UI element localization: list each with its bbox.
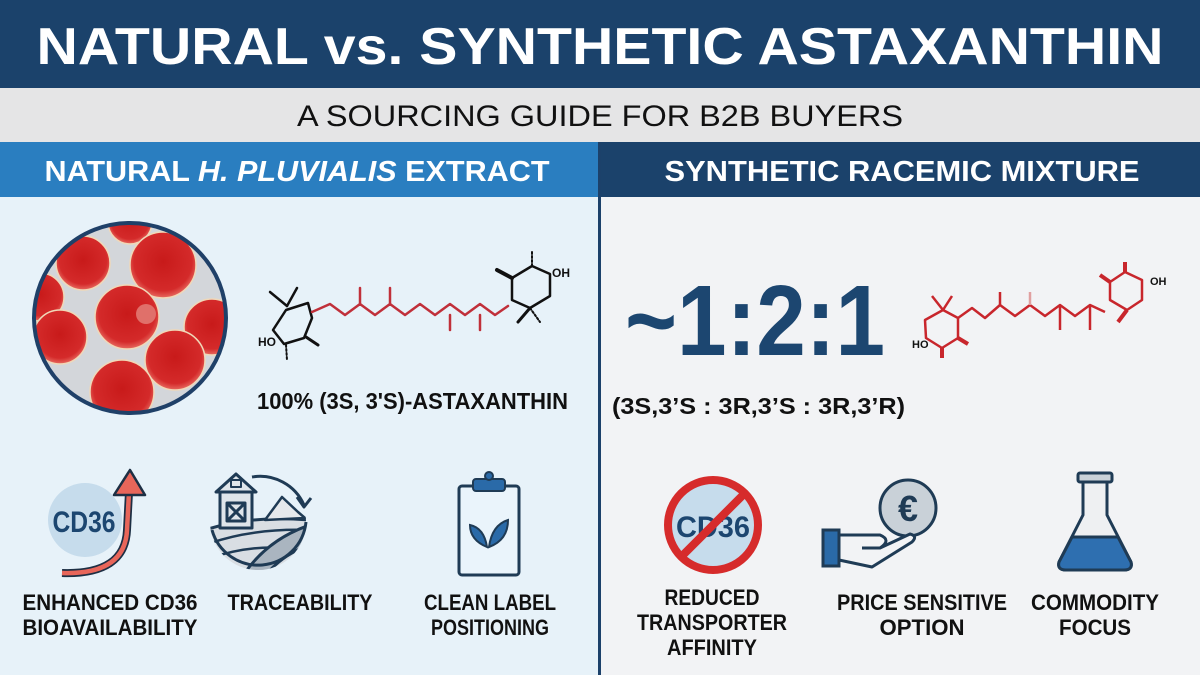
labels: synthetic traits: REDUCED	[664, 585, 760, 610]
labels: synthetic traits: TRANSPORTER	[637, 610, 787, 635]
subtitle: A SOURCING GUIDE FOR B2B BUYERS	[297, 100, 903, 133]
labels: natural benefits	[22, 590, 556, 640]
backgrounds	[0, 197, 600, 675]
label: natural stereochemistry: 100% (3S, 3'S)-ASTAXANTHIN	[257, 388, 568, 414]
title band	[0, 0, 1200, 88]
icon: euro coin hand: €	[898, 488, 918, 529]
icon: euro coin hand	[823, 480, 936, 567]
icon: CD36 prohibited: CD36	[676, 511, 750, 544]
molecule: synthetic: OH	[1150, 276, 1167, 288]
labels: synthetic traits: OPTION	[880, 615, 964, 640]
icon: flask	[1059, 473, 1131, 570]
header: synthetic: SYNTHETIC RACEMIC MIXTURE	[664, 156, 1140, 188]
subtitle band	[0, 88, 1200, 142]
icon: CD36 prohibited	[668, 480, 758, 570]
labels: natural benefits: CLEAN LABEL	[424, 590, 556, 615]
molecule: natural astaxanthin: HO	[258, 335, 276, 349]
molecule: synthetic: HO	[912, 339, 929, 351]
label: synthetic stereochemistry: (3S,3’S : 3R,3’S : 3R,3’R)	[612, 393, 905, 419]
labels: natural benefits: POSITIONING	[431, 615, 549, 640]
title: NATURAL vs. SYNTHETIC ASTAXANTHIN	[36, 18, 1164, 76]
labels: natural benefits: ENHANCED CD36	[22, 590, 198, 615]
header: natural	[0, 142, 598, 197]
labels: synthetic traits: AFFINITY	[667, 635, 757, 660]
microscope image	[32, 221, 228, 415]
icon: traceability farm	[210, 472, 312, 570]
labels: natural benefits: BIOAVAILABILITY	[22, 615, 198, 640]
header: synthetic	[601, 142, 1200, 197]
icon: CD36 up arrow	[48, 470, 145, 573]
icon: clipboard leaf	[459, 472, 519, 575]
labels: synthetic traits: FOCUS	[1059, 615, 1131, 640]
labels: synthetic traits: COMMODITY	[1031, 590, 1159, 615]
labels: synthetic traits	[637, 585, 1159, 660]
molecule: natural astaxanthin: OH	[552, 266, 570, 280]
labels: natural benefits: TRACEABILITY	[228, 590, 373, 615]
icon: CD36 up arrow: CD36	[52, 506, 116, 539]
molecule: natural astaxanthin	[258, 250, 570, 360]
labels: synthetic traits: PRICE SENSITIVE	[837, 590, 1007, 615]
ratio: ~1:2:1	[625, 265, 885, 377]
header: natural: NATURAL H. PLUVIALIS EXTRACT	[44, 156, 550, 188]
molecule: synthetic	[912, 262, 1167, 358]
